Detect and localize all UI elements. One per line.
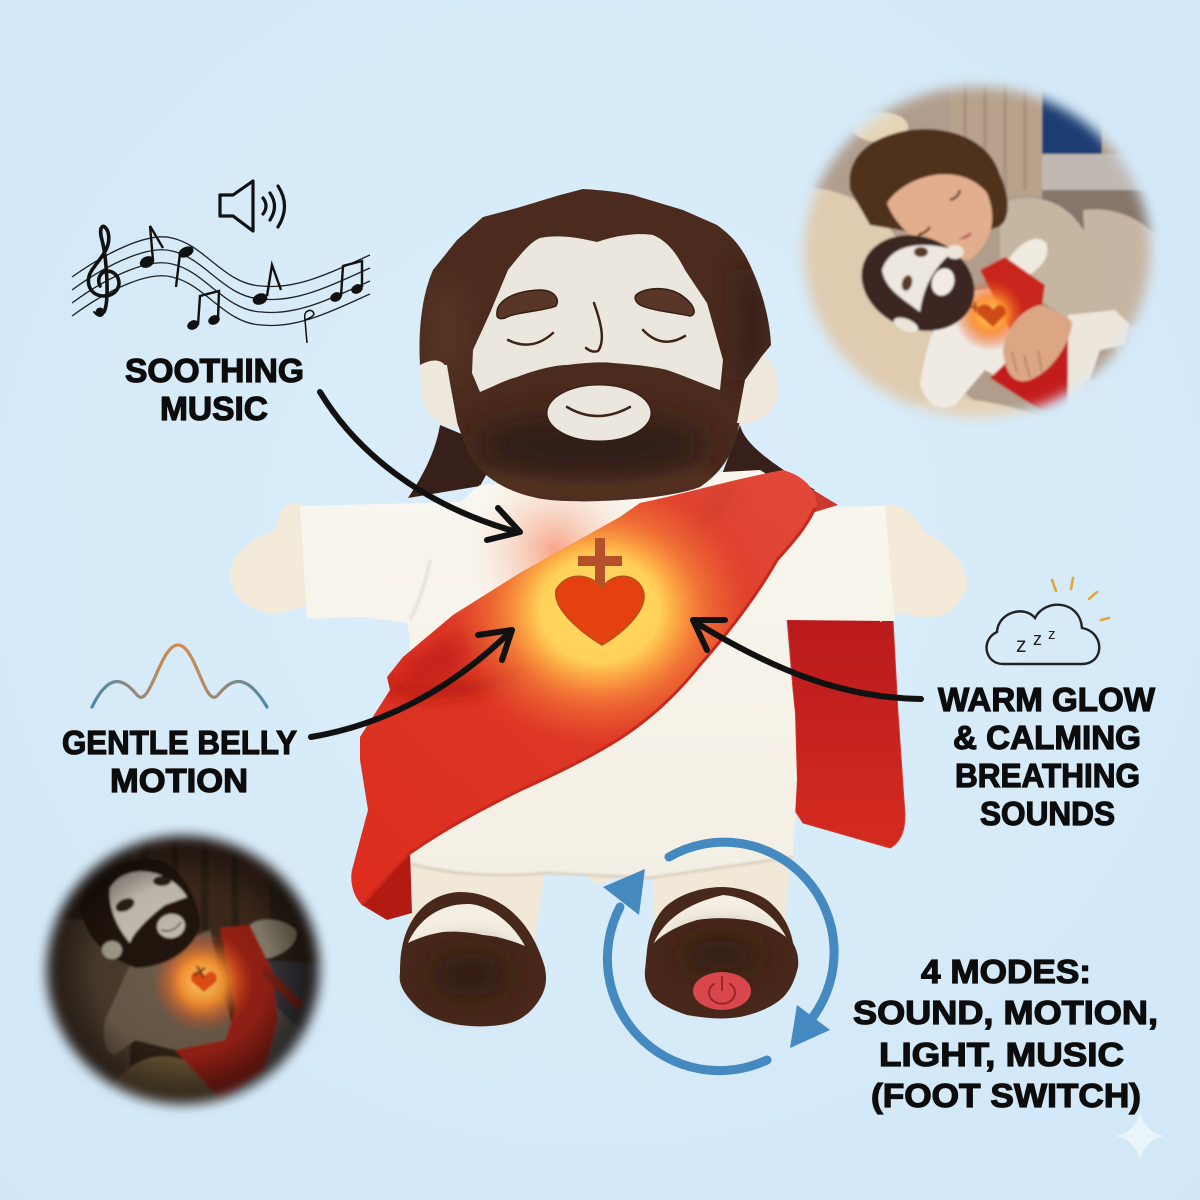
label: warm glow: SOUNDS (980, 795, 1115, 832)
label: soothing music: SOOTHING (125, 352, 304, 389)
icon: cloud with zzz (987, 578, 1109, 664)
hugging arm (1003, 305, 1072, 381)
icon: cloud with zzz: z (1033, 629, 1042, 649)
label: warm glow: & CALMING (953, 719, 1141, 756)
icon: cloud with zzz: z (1048, 626, 1056, 643)
label: 4 modes: LIGHT, MUSIC (879, 1036, 1124, 1073)
plush body (919, 288, 1010, 408)
icon: cycle arrows (603, 842, 834, 1071)
icon: treble clef (88, 226, 119, 316)
cross (578, 538, 622, 587)
eyebrows (497, 290, 557, 319)
photo: plush glowing in the dark (37, 826, 329, 1114)
right foot (645, 887, 798, 1018)
label: warm glow: BREATHING (955, 757, 1140, 794)
label: 4 modes: 4 MODES: (921, 953, 1091, 990)
sash (351, 465, 817, 905)
label: 4 modes: (FOOT SWITCH) (871, 1077, 1141, 1114)
label: 4 modes (853, 953, 1158, 1114)
label: gentle belly motion (62, 724, 297, 799)
face (472, 234, 723, 392)
ears (420, 361, 458, 427)
long hair behind (408, 425, 815, 500)
plush head (860, 234, 976, 332)
icon: cloud with zzz: z (1016, 634, 1026, 657)
robe and sleeves (300, 470, 895, 877)
head and hair (420, 189, 771, 501)
arrow: music to chest (320, 392, 520, 540)
arrow: belly motion (311, 630, 512, 737)
plush red sash (980, 257, 1045, 330)
sash shoulder back (810, 488, 838, 512)
child hair (850, 129, 1008, 240)
icon: music staff with notes (72, 226, 370, 343)
glow (153, 932, 253, 1032)
sash folds (704, 480, 734, 522)
label: soothing music (125, 352, 304, 427)
label: soothing music: MUSIC (160, 390, 268, 427)
icon: speaker (220, 181, 284, 231)
photo: child sleeping with plush (797, 78, 1158, 424)
plush body dim (104, 930, 235, 1055)
plush glow (956, 281, 1022, 350)
sash lining (362, 850, 412, 920)
glow spill on robe (470, 465, 640, 635)
heart glow (446, 494, 738, 734)
plush figure (230, 189, 967, 1026)
label: 4 modes: SOUND, MOTION, (853, 994, 1158, 1031)
label: gentle belly motion: MOTION (110, 762, 248, 799)
power switch (693, 972, 751, 1010)
smile (567, 407, 630, 416)
nose (586, 303, 602, 352)
cape (787, 617, 905, 848)
mouth patch (547, 385, 651, 441)
icon: notes (138, 226, 364, 343)
plush red sash dim (175, 925, 278, 1102)
left foot (400, 892, 546, 1026)
right hand (880, 505, 967, 622)
sweater (1000, 197, 1090, 318)
child face (887, 174, 992, 260)
label: warm glow: WARM GLOW (938, 681, 1156, 718)
icon: sparkle (1116, 1112, 1164, 1160)
label: gentle belly motion: GENTLE BELLY (62, 724, 297, 761)
legs (410, 850, 792, 950)
closed eyes (508, 330, 685, 345)
plush head dim (80, 859, 200, 968)
label: warm glow (938, 681, 1156, 832)
icon: motion wave (92, 645, 267, 707)
heart (556, 576, 644, 645)
arrow: warm glow (693, 620, 921, 699)
left hand (230, 503, 315, 613)
